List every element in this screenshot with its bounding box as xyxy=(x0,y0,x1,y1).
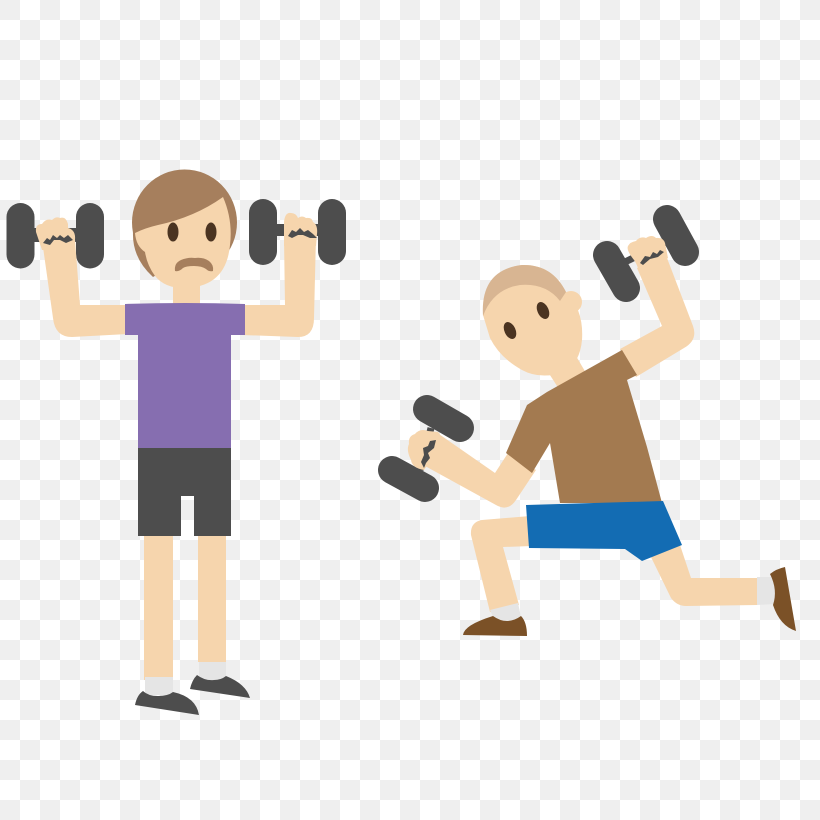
left dumbbell xyxy=(6,203,104,268)
figure: standing man in purple shirt xyxy=(6,170,346,715)
blue shorts xyxy=(526,501,682,561)
right hand grip xyxy=(288,228,317,238)
receding hair xyxy=(483,265,566,316)
hair xyxy=(132,170,237,276)
raised arm and hand xyxy=(620,236,694,377)
eyes xyxy=(168,222,216,242)
ear xyxy=(560,291,582,313)
head xyxy=(483,265,582,376)
lowered dumbbell xyxy=(392,409,460,488)
right dumbbell xyxy=(249,199,346,265)
bent leg xyxy=(471,516,532,612)
mustache xyxy=(175,258,213,271)
eyes xyxy=(501,300,552,341)
front shoe xyxy=(463,616,527,636)
left hand grip xyxy=(43,235,73,245)
left shoe xyxy=(135,691,199,715)
brown t-shirt xyxy=(506,350,662,503)
face xyxy=(135,197,231,288)
neck xyxy=(548,356,586,389)
extended leg sock xyxy=(757,577,776,605)
upper dumbbell xyxy=(607,219,685,288)
right shoe xyxy=(190,675,250,698)
back hair lock xyxy=(133,232,165,277)
neck xyxy=(173,280,200,306)
lowered hand grip xyxy=(421,440,436,468)
rear shoe xyxy=(770,567,796,631)
legs xyxy=(144,535,226,680)
extended leg xyxy=(650,545,758,606)
right arm and hand xyxy=(242,213,317,337)
figure: lunging man in brown shirt xyxy=(392,219,796,636)
purple t-shirt xyxy=(125,303,245,449)
bent leg sock xyxy=(490,603,521,622)
dark shorts xyxy=(138,448,231,536)
lowered arm and hand xyxy=(408,430,536,508)
left arm and hand xyxy=(36,217,128,337)
upper hand grip xyxy=(640,250,664,265)
socks xyxy=(145,662,226,695)
